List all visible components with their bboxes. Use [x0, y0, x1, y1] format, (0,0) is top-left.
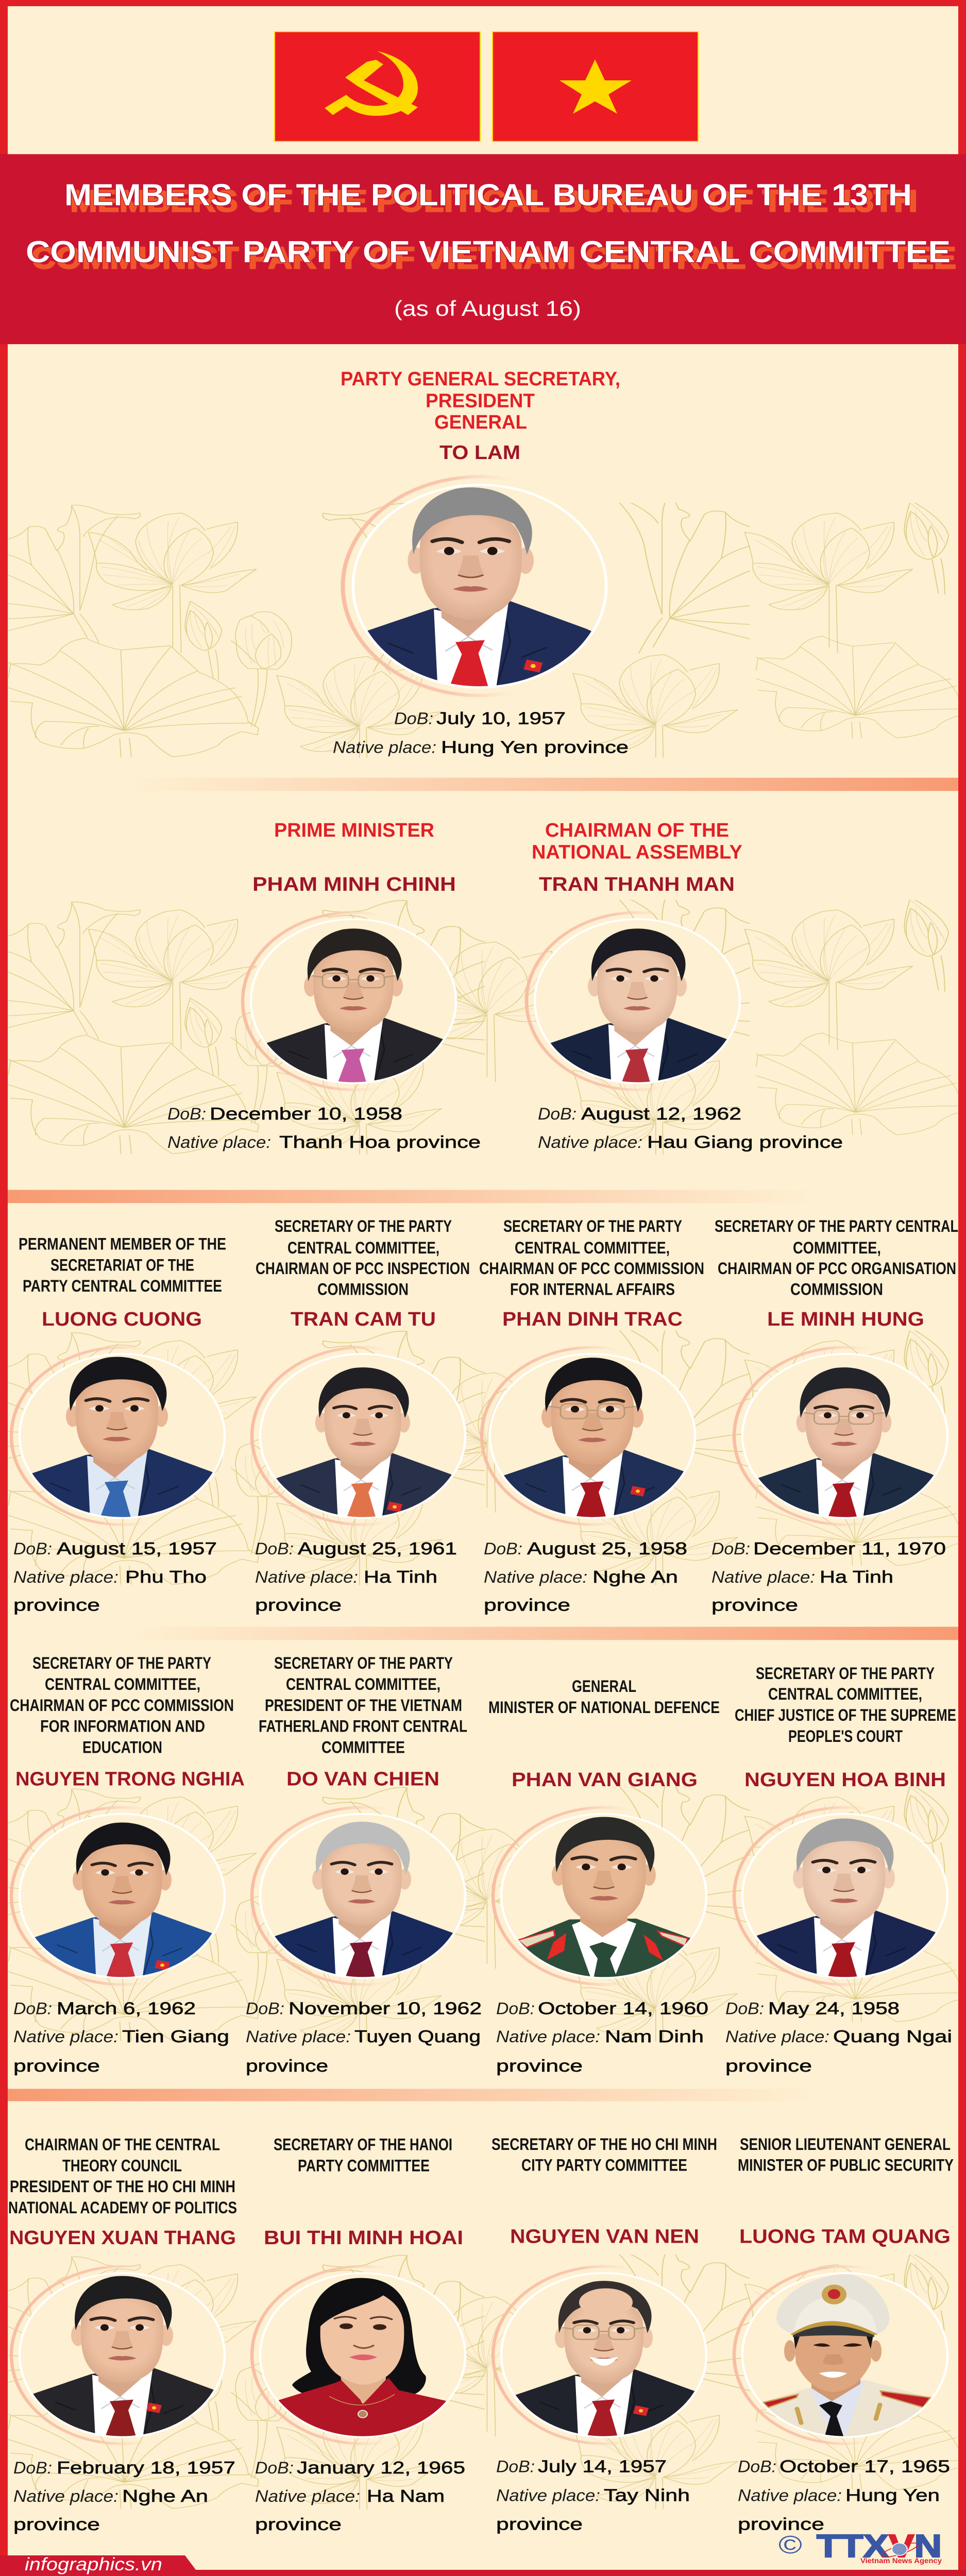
details: DoB: [167, 1105, 206, 1123]
role: GENERAL [572, 1677, 636, 1696]
details: Ha Tinh [820, 1568, 893, 1587]
details: December 10, 1958 [210, 1105, 402, 1124]
name: NGUYEN VAN NEN [510, 2226, 699, 2247]
role: PERMANENT MEMBER OF THE [19, 1234, 226, 1253]
name: BUI THI MINH HOAI [264, 2227, 463, 2249]
lotus line art backgrounds [8, 485, 966, 2545]
divider band 4 [8, 2089, 958, 2101]
title band [0, 154, 966, 344]
portrait [252, 1807, 474, 1985]
details: Native place: [711, 1568, 815, 1586]
details: Quang Ngai [833, 2027, 952, 2046]
details: Native place: [484, 1568, 587, 1586]
role [259, 1654, 467, 1756]
details [725, 1999, 952, 2076]
details: Native place: [538, 1133, 642, 1151]
name: NGUYEN XUAN THANG [9, 2227, 236, 2249]
details [13, 1539, 217, 1615]
role: PRIME MINISTER [274, 819, 434, 841]
details: August 12, 1962 [581, 1105, 741, 1124]
name: PHAN VAN GIANG [512, 1769, 698, 1791]
member: Luong Cuong [6, 1234, 233, 1615]
portrait [734, 2266, 961, 2444]
details [711, 1539, 946, 1615]
name: TO LAM [439, 442, 520, 464]
role: CHAIRMAN OF PCC COMMISSION [479, 1259, 704, 1278]
details: DoB: [13, 2459, 52, 2477]
role: EDUCATION [82, 1738, 162, 1756]
details: July 10, 1957 [436, 709, 566, 728]
details [13, 1999, 229, 2076]
details: Native place: [255, 1568, 358, 1586]
member: Tran Thanh Man [527, 819, 843, 1152]
role: PARTY COMMITTEE [298, 2156, 430, 2175]
role: THEORY COUNCIL [62, 2156, 182, 2175]
details: December 11, 1970 [753, 1539, 946, 1558]
member: Pham Minh Chinh [167, 819, 481, 1152]
details: October 17, 1965 [779, 2457, 950, 2476]
role: SECRETARY OF THE HANOI [274, 2135, 452, 2154]
role [8, 2135, 237, 2217]
role: SECRETARIAT OF THE [50, 1256, 194, 1274]
details: DoB: [255, 2459, 294, 2477]
details [496, 1999, 708, 2076]
details: province [255, 1596, 342, 1615]
logo: TTXVN Vietnam News Agency: Vietnam News Agency [860, 2557, 942, 2565]
details: province [255, 2515, 342, 2534]
details [333, 709, 629, 757]
details [496, 2457, 690, 2534]
details: Tien Giang [122, 2027, 229, 2046]
details: November 10, 1962 [289, 1999, 482, 2019]
details: Phu Tho [125, 1568, 207, 1587]
details [538, 1105, 843, 1152]
portrait [733, 1807, 960, 1985]
role: COMMITTEE [321, 1738, 405, 1756]
member: Phan Dinh Trac [479, 1217, 708, 1615]
portrait [11, 2266, 238, 2444]
details: Tay Ninh [604, 2486, 690, 2505]
details: DoB: [394, 709, 433, 728]
role: PARTY GENERAL SECRETARY, [341, 368, 620, 390]
role: PEOPLE'S COURT [788, 1727, 903, 1745]
role [256, 1217, 470, 1299]
details: Native place: [496, 2027, 600, 2046]
details: Hung Yen province [441, 738, 629, 757]
details [738, 2457, 950, 2534]
member: Phan Van Giang [488, 1677, 720, 2076]
details [484, 1539, 687, 1615]
portrait [6, 1347, 233, 1524]
details: August 15, 1957 [57, 1539, 217, 1558]
member: Nguyen Hoa Binh [725, 1664, 960, 2076]
member: Tran Cam Tu [252, 1217, 473, 1615]
role [738, 2135, 954, 2175]
portrait [493, 2266, 715, 2444]
details: May 24, 1958 [768, 1999, 900, 2019]
role: CITY PARTY COMMITTEE [521, 2156, 687, 2175]
details: DoB: [13, 1999, 52, 2018]
role: COMMISSION [790, 1280, 883, 1299]
details: March 6, 1962 [57, 1999, 196, 2019]
details [167, 1105, 481, 1152]
logo: TTXVN Vietnam News Agency: © [778, 2530, 802, 2559]
name: TRAN THANH MAN [539, 873, 735, 895]
details: Thanh Hoa province [279, 1133, 481, 1152]
details: DoB: [538, 1105, 577, 1123]
details: October 14, 1960 [538, 1999, 708, 2019]
details: Native place: [725, 2027, 829, 2046]
details: Nam Dinh [605, 2027, 704, 2046]
role: COMMISSION [317, 1280, 409, 1299]
name: PHAN DINH TRAC [502, 1308, 683, 1330]
portrait [334, 477, 617, 696]
details: Nghe An [122, 2487, 208, 2506]
details: Native place: [496, 2486, 600, 2504]
details [255, 1539, 457, 1615]
role: SECRETARY OF THE PARTY [274, 1654, 453, 1672]
portrait [243, 912, 466, 1090]
role: SECRETARY OF THE PARTY [275, 1217, 452, 1235]
details: Nghe An [592, 1568, 678, 1587]
role [10, 1654, 234, 1756]
member: Bui Thi Minh Hoai [252, 2135, 473, 2534]
name: LE MINH HUNG [767, 1308, 924, 1330]
member: To Lam [333, 368, 629, 757]
details: province [13, 1596, 100, 1615]
role [715, 1217, 958, 1299]
details: DoB: [725, 1999, 764, 2018]
member: Luong Tam Quang [734, 2135, 961, 2534]
details: Native place: [13, 2487, 118, 2505]
details: Native place: [13, 1568, 118, 1586]
role: CENTRAL COMMITTEE, [286, 1675, 440, 1693]
role: NATIONAL ASSEMBLY [532, 841, 742, 863]
role: PARTY CENTRAL COMMITTEE [23, 1277, 222, 1295]
divider band 1 [8, 778, 958, 791]
details: July 14, 1957 [538, 2457, 667, 2476]
name: NGUYEN TRONG NGHIA [15, 1768, 245, 1790]
role: SECRETARY OF THE PARTY [503, 1217, 682, 1235]
details: province [496, 2057, 583, 2076]
name: TRAN CAM TU [291, 1308, 436, 1330]
name: PHAM MINH CHINH [252, 873, 456, 895]
role: MINISTER OF NATIONAL DEFENCE [488, 1698, 720, 1717]
details: Native place: [246, 2027, 351, 2046]
member: Nguyen Van Nen [492, 2135, 717, 2534]
details: province [13, 2057, 100, 2076]
role: PRESIDENT OF THE HO CHI MINH [10, 2177, 235, 2196]
portrait [734, 1347, 956, 1524]
details: Tuyen Quang [354, 2027, 481, 2046]
member: Nguyen Trong Nghia [10, 1654, 245, 2076]
role: FOR INTERNAL AFFAIRS [510, 1280, 675, 1299]
role: PRESIDENT [426, 390, 535, 412]
details: DoB: [711, 1539, 750, 1558]
title band: (as of August 16) [394, 296, 581, 320]
role: CHAIRMAN OF THE CENTRAL [25, 2135, 220, 2154]
portrait [11, 1807, 234, 1985]
details: province [13, 2515, 100, 2534]
details: Native place: [738, 2486, 842, 2504]
details: February 18, 1957 [57, 2459, 235, 2478]
details: province [725, 2057, 812, 2076]
details: Native place: [255, 2487, 360, 2505]
divider band 2 [8, 1190, 958, 1203]
details: DoB: [738, 2457, 776, 2476]
role [274, 2135, 452, 2175]
member: Nguyen Xuan Thang [8, 2135, 238, 2534]
portrait [252, 2266, 473, 2444]
role: SECRETARY OF THE PARTY [32, 1654, 211, 1672]
member: Do Van Chien [246, 1654, 482, 2076]
details: August 25, 1958 [527, 1539, 687, 1558]
role: SECRETARY OF THE HO CHI MINH [492, 2135, 717, 2154]
member: Le Minh Hung [711, 1217, 958, 1615]
role [19, 1234, 226, 1295]
role: NATIONAL ACADEMY OF POLITICS [8, 2198, 237, 2217]
portrait [252, 1347, 473, 1524]
role [341, 368, 620, 433]
name: DO VAN CHIEN [286, 1768, 439, 1790]
flag: Communist Party [275, 32, 480, 141]
details: DoB: [484, 1539, 522, 1558]
role [488, 1677, 720, 1717]
role: FATHERLAND FRONT CENTRAL [259, 1717, 467, 1736]
details: Ha Nam [367, 2487, 445, 2506]
role: COMMITTEE, [793, 1239, 881, 1257]
role: CENTRAL COMMITTEE, [515, 1239, 670, 1257]
details: January 12, 1965 [297, 2459, 465, 2478]
portrait [527, 912, 750, 1090]
role [532, 819, 742, 863]
details: DoB: [246, 1999, 284, 2018]
role: GENERAL [434, 411, 527, 433]
details: Hung Yen [845, 2486, 940, 2505]
details: Hau Giang province [647, 1133, 843, 1152]
details: province [484, 1596, 570, 1615]
details [255, 2459, 465, 2534]
details: August 25, 1961 [298, 1539, 457, 1558]
details: Native place: [13, 2027, 118, 2046]
role [492, 2135, 717, 2175]
details: Native place: [333, 738, 436, 757]
role: PRESIDENT OF THE VIETNAM [265, 1696, 462, 1715]
flag: Vietnam [493, 32, 698, 141]
details: province [711, 1596, 798, 1615]
role [479, 1217, 704, 1299]
role: CENTRAL COMMITTEE, [45, 1675, 200, 1693]
details: DoB: [496, 2457, 535, 2476]
role: FOR INFORMATION AND [40, 1717, 205, 1736]
role: CHAIRMAN OF THE [545, 819, 729, 841]
logo: TTXVN Vietnam News Agency: TTXVN [817, 2528, 942, 2564]
role: CENTRAL COMMITTEE, [287, 1239, 439, 1257]
details: province [496, 2515, 583, 2534]
details: province [246, 2057, 328, 2076]
role: CHAIRMAN OF PCC COMMISSION [10, 1696, 234, 1715]
divider band 3 [8, 1627, 958, 1640]
details: DoB: [255, 1539, 294, 1558]
role [735, 1664, 956, 1745]
details: province [738, 2515, 824, 2534]
details: DoB: [13, 1539, 52, 1558]
footer tab: infographics.vn: infographics.vn [25, 2554, 162, 2574]
portrait [482, 1347, 708, 1524]
details: Ha Tinh [364, 1568, 437, 1587]
details [13, 2459, 235, 2534]
details: Native place: [167, 1133, 271, 1151]
role: CHAIRMAN OF PCC INSPECTION [256, 1259, 470, 1278]
name: LUONG CUONG [42, 1308, 202, 1330]
details: DoB: [496, 1999, 535, 2018]
portrait [493, 1807, 720, 1985]
details [246, 1999, 482, 2076]
